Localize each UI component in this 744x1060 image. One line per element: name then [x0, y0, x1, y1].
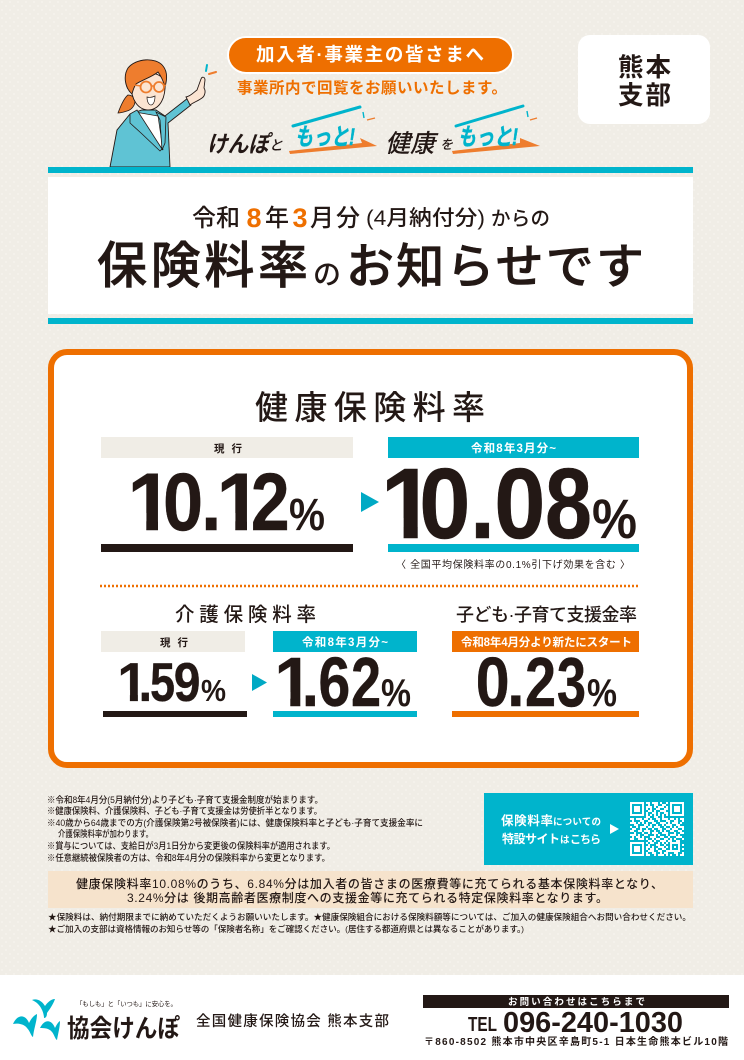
address: 〒860-8502 熊本市中央区辛島町5-1 日本生命熊本ビル10階 [424, 1035, 728, 1048]
illustration: woman pointing [110, 60, 216, 167]
slogan [207, 106, 540, 158]
star notes: ★ご加入の支部は資格情報のお知らせ等の「保険者名称」をご確認ください。(居住する都道府県とは異なることがあります。) [48, 923, 524, 934]
footnotes: ※令和8年4月分(5月納付分)より子ども·子育て支援金制度が始まります。 [47, 794, 323, 805]
special site link box: 特設サイト [502, 831, 560, 846]
branch badge [578, 35, 710, 124]
phone number: TEL [468, 1014, 497, 1036]
current health rate: 現行 [214, 442, 242, 455]
slogan: を [440, 137, 453, 152]
slogan: もっと! [458, 124, 518, 151]
main heading [97, 238, 644, 294]
new health rate: 1 [380, 448, 436, 560]
current care rate: 5 [150, 651, 175, 713]
current care rate: 9 [174, 651, 200, 713]
main heading: の [313, 259, 341, 290]
special site link box: は [560, 835, 570, 846]
contact band: お問い合わせはこちらまで [508, 996, 645, 1008]
new health rate: 8 [545, 447, 592, 560]
new health rate [380, 437, 639, 571]
main heading: お知らせです [346, 241, 644, 294]
star notes [48, 911, 691, 934]
subtitle: 8 [246, 203, 262, 233]
slogan: と [269, 137, 283, 153]
QR code [630, 802, 684, 856]
arrow: care [252, 674, 267, 691]
branch badge: 熊本 [618, 54, 671, 82]
child support heading: 子ども·子育て支援金率 [456, 605, 637, 625]
health insurance heading: 健康保険料率 [255, 389, 485, 426]
special site link box: についての [553, 817, 601, 828]
current health rate: 2 [251, 457, 290, 548]
footnotes [47, 794, 423, 863]
slogan: けんぽ [207, 131, 273, 157]
new health rate: 0 [494, 448, 545, 560]
new care rate [273, 631, 417, 722]
current care rate [101, 631, 247, 717]
child support rate: 0 [476, 643, 510, 721]
subtitle: 令和 [192, 205, 240, 232]
footnotes: ※賞与については、支給日が3月1日分から変更後の保険料率が適用されます。 [47, 840, 335, 851]
current care rate: . [138, 653, 152, 714]
new care rate: 6 [318, 643, 350, 721]
subtitle: (4月納付分) [366, 207, 485, 230]
special site link box: 保険料率 [501, 813, 553, 828]
phone number: 096-240-1030 [503, 1007, 683, 1039]
child support rate [452, 631, 639, 722]
logo tagline: 「もしも」と「いつも」に安心を。 [76, 999, 177, 1008]
subtitle: 年 [265, 205, 289, 232]
rate breakdown box [48, 871, 693, 908]
footnotes: ※40歳から64歳までの方(介護保険第2号被保険者)には、健康保険料率と子ども·子育て支援金率に [47, 817, 423, 828]
circulation request: 事業所内で回覧をお願いいたします。 [237, 78, 507, 97]
slogan: もっと! [295, 124, 355, 151]
subtitle: からの [491, 208, 550, 230]
new care rate: 令和8年3月分~ [302, 635, 388, 649]
new health rate: 0 [419, 448, 470, 560]
current health rate: 1 [216, 457, 262, 548]
slogan: 健康 [385, 130, 439, 158]
star notes: ★保険料は、納付期限までに納めていただくようお願いいたします。★健康保険組合における保険料額等については、ご加入の健康保険組合へお問い合わせください。 [48, 911, 691, 922]
rate breakdown box: 健康保険料率10.08%のうち、6.84%分は加入者の皆さまの医療費等に充てられる基本保険料率となり、 [76, 876, 663, 891]
title panel [48, 167, 693, 324]
child support rate: . [507, 644, 525, 722]
new health rate: 〈 全国平均保険料率の0.1%引下げ効果を含む 〉 [396, 558, 630, 571]
special site link box [484, 793, 693, 865]
current health rate: % [289, 489, 325, 540]
child support rate: % [587, 672, 617, 715]
long-term care heading: 介護保険料率 [175, 604, 316, 626]
organisation name: 全国健康保険協会 熊本支部 [196, 1012, 390, 1030]
current health rate: 1 [127, 457, 173, 548]
logo birds [13, 999, 60, 1040]
subtitle [192, 203, 550, 233]
main heading: 保険料率 [97, 238, 308, 294]
new care rate: 1 [274, 643, 313, 721]
special site link box: こちら [570, 833, 601, 846]
rate panel [51, 352, 690, 765]
current health rate: 0 [163, 457, 203, 548]
current health rate: . [201, 455, 222, 548]
child support rate: 2 [525, 644, 556, 721]
new health rate: % [592, 487, 637, 550]
new care rate: % [381, 672, 411, 715]
footnotes: ※任意継続被保険者の方は、令和8年4月分の保険料率から変更となります。 [47, 852, 330, 863]
logo wordmark: 協会けんぽ [67, 1015, 180, 1043]
dotted divider [100, 585, 640, 587]
current care rate: % [201, 673, 226, 708]
arrow: health [361, 492, 379, 512]
current health rate [101, 437, 353, 552]
subtitle: 月分 [310, 205, 360, 232]
child support rate: 3 [557, 644, 586, 722]
subtitle: 3 [292, 203, 308, 233]
audience pill [228, 37, 513, 73]
branch badge: 支部 [618, 82, 671, 110]
child support rate: 令和8年4月分より新たにスタート [461, 635, 632, 649]
current care rate: 現行 [160, 636, 188, 649]
new health rate: 令和8年3月分~ [471, 441, 556, 455]
footer [0, 975, 744, 1060]
footnotes: 介護保険料率が加わります。 [58, 828, 153, 839]
rate breakdown box: 3.24%分は 後期高齢者医療制度への支援金等に充てられる特定保険料率となります。 [127, 890, 608, 905]
new health rate: . [470, 449, 495, 560]
footnotes: ※健康保険料、介護保険料、子ども·子育て支援金は労使折半となります。 [47, 805, 322, 816]
audience pill: 加入者·事業主の皆さまへ [256, 44, 484, 65]
new care rate: . [302, 644, 319, 722]
contact band [423, 995, 729, 1008]
current care rate: 1 [117, 651, 148, 713]
new care rate: 2 [351, 643, 381, 722]
